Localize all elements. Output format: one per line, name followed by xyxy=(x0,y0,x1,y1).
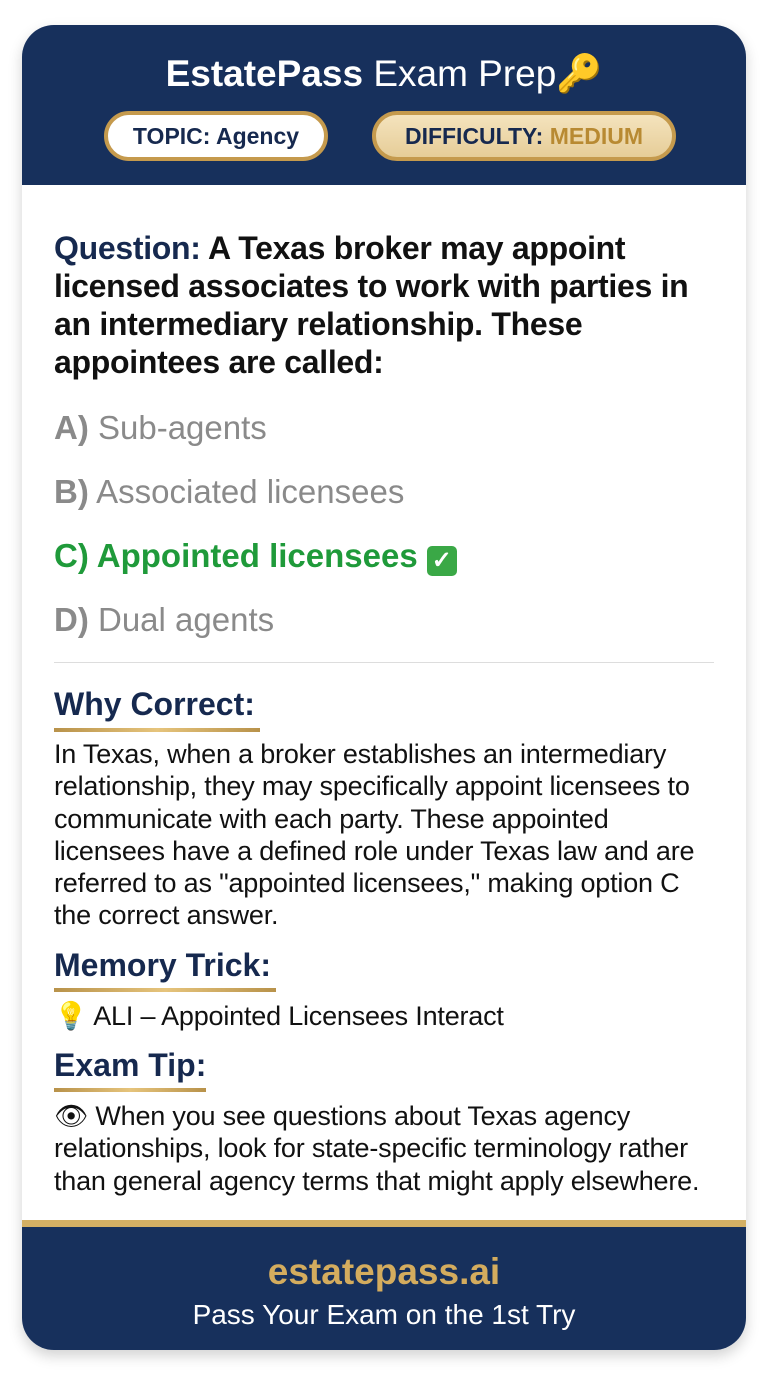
badge: topic: TOPIC: Agency xyxy=(133,123,299,149)
options: C) Appointed licensees xyxy=(54,537,418,574)
tagline: Pass Your Exam on the 1st Try xyxy=(193,1299,575,1330)
why correct text: communicate with each party. These appointed xyxy=(54,804,609,834)
exam tip text xyxy=(54,1101,699,1196)
options: A) Sub-agents xyxy=(54,409,267,446)
options: B) Associated licensees xyxy=(54,473,404,510)
badge: difficulty: DIFFICULTY: MEDIUM xyxy=(405,123,643,149)
memory trick text: 💡 ALI – Appointed Licensees Interact xyxy=(54,1001,504,1031)
badge: topic xyxy=(104,111,328,161)
heading: why correct: Why Correct: xyxy=(54,686,255,722)
title: EstatePass Exam Prep🔑 xyxy=(166,53,602,94)
options xyxy=(54,409,457,638)
options: D) Dual agents xyxy=(54,601,274,638)
question: an intermediary relationship. These xyxy=(54,306,582,342)
why correct text: In Texas, when a broker establishes an intermediary xyxy=(54,739,666,769)
why correct text: referred to as "appointed licensees," making option C xyxy=(54,868,679,898)
footer url: estatepass.ai xyxy=(268,1251,500,1292)
exam tip text: than general agency terms that might apply elsewhere. xyxy=(54,1166,699,1196)
question: Question: A Texas broker may appoint xyxy=(54,230,625,266)
question: licensed associates to work with parties in xyxy=(54,268,688,304)
heading: exam tip: Exam Tip: xyxy=(54,1047,206,1083)
heading: memory trick: Memory Trick: xyxy=(54,947,271,983)
why correct text: the correct answer. xyxy=(54,900,278,930)
footer xyxy=(22,1220,746,1357)
options: ✓ xyxy=(432,547,452,574)
exam tip text: relationships, look for state-specific terminology rather xyxy=(54,1133,688,1163)
why correct text: licensees have a defined role under Texas law and are xyxy=(54,836,694,866)
why correct text xyxy=(54,739,694,930)
header xyxy=(22,25,746,185)
why correct text: relationship, they may specifically appoint licensees to xyxy=(54,771,690,801)
exam tip text: 👁 When you see questions about Texas agency xyxy=(54,1101,630,1131)
question xyxy=(54,230,688,380)
badge: difficulty xyxy=(372,111,676,161)
question: appointees are called: xyxy=(54,344,384,380)
